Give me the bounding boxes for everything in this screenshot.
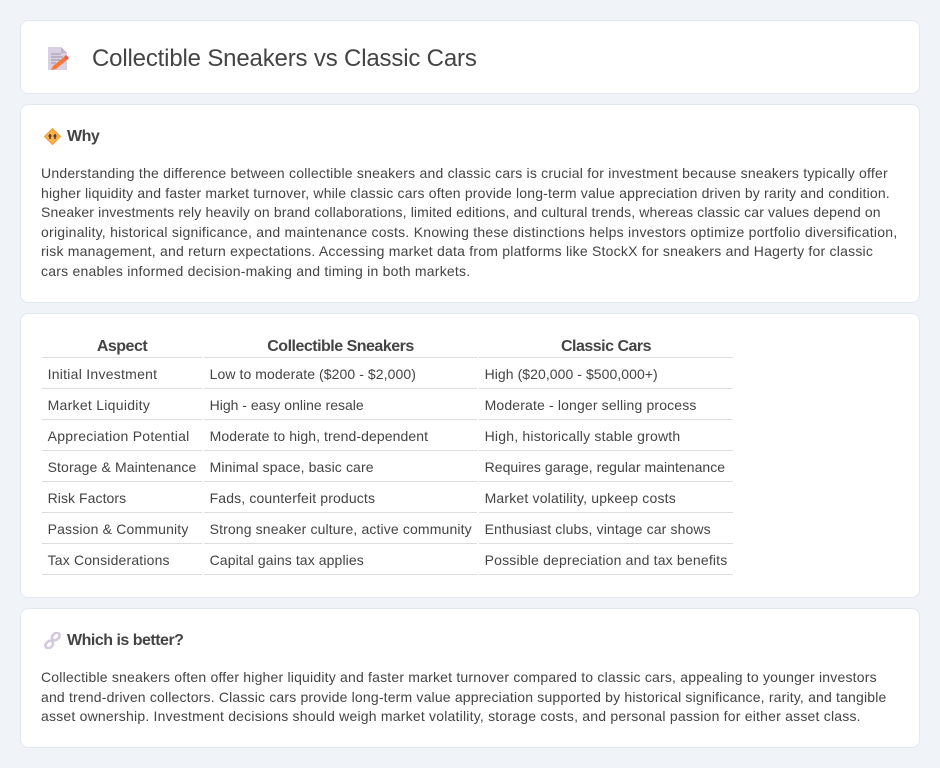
- comparison table: Moderate - longer selling process: [485, 397, 697, 413]
- comparison table: High - easy online resale: [210, 397, 364, 413]
- text block: why explanation: risk management, and return expectations. Accessing market data from platforms like StockX for sneakers and Hagerty for classic: [41, 243, 873, 259]
- comparison table: Requires garage, regular maintenance: [485, 459, 725, 475]
- title: Collectible Sneakers vs Classic Cars: [92, 45, 477, 72]
- icon: document with pencil: [48, 47, 69, 70]
- comparison table: Tax Considerations: [48, 552, 170, 568]
- comparison table: Strong sneaker culture, active community: [210, 521, 472, 537]
- comparison table: Minimal space, basic care: [210, 459, 374, 475]
- comparison table: Storage & Maintenance: [48, 459, 196, 475]
- comparison table: High ($20,000 - $500,000+): [485, 366, 658, 382]
- comparison table: Market Liquidity: [48, 397, 150, 413]
- comparison table: Appreciation Potential: [48, 428, 190, 444]
- comparison table: Capital gains tax applies: [210, 552, 364, 568]
- comparison table: Moderate to high, trend-dependent: [210, 428, 428, 444]
- text block: verdict: [41, 669, 886, 724]
- text block: verdict: asset ownership. Investment decisions should weigh market volatility, storage costs, and personal passion for either asset class.: [41, 708, 861, 724]
- comparison table: Passion & Community: [48, 521, 189, 537]
- comparison table: Collectible Sneakers: [267, 338, 414, 355]
- text block: why explanation: higher liquidity and faster market turnover, while classic cars often provide long-term value appreciation driven by rarity and condition.: [41, 185, 890, 201]
- comparison table: [42, 338, 733, 575]
- icon: chain link: [44, 632, 61, 649]
- comparison table: Fads, counterfeit products: [210, 490, 375, 506]
- comparison table: Risk Factors: [48, 490, 126, 506]
- comparison table: Low to moderate ($200 - $2,000): [210, 366, 416, 382]
- icon: diamond caution sign: [44, 128, 61, 145]
- panel: title card: [20, 20, 920, 94]
- text block: verdict: Collectible sneakers often offer higher liquidity and faster market turnover compared to classic cars, appealing to younger investors: [41, 669, 877, 685]
- comparison table: Classic Cars: [561, 338, 651, 355]
- text block: why explanation: Understanding the difference between collectible sneakers and classic cars is crucial for investment because sneakers typically offer: [41, 165, 888, 181]
- comparison table: High, historically stable growth: [485, 428, 680, 444]
- comparison table: Possible depreciation and tax benefits: [485, 552, 727, 568]
- text block: why explanation: originality, historical significance, and maintenance costs. Knowing these distinctions helps investors optimize portfolio diversification,: [41, 224, 897, 240]
- comparison table: Initial Investment: [48, 366, 157, 382]
- text block: why explanation: [41, 165, 897, 279]
- panel: comparison table card: [20, 313, 920, 598]
- heading: why: Why: [67, 128, 99, 145]
- panel: which is better: [20, 608, 920, 748]
- text block: verdict: and trend-driven collectors. Classic cars provide long-term value appreciation supported by historical significance, rarity, and tangible: [41, 689, 886, 705]
- comparison table: Market volatility, upkeep costs: [485, 490, 676, 506]
- heading: which is better: Which is better?: [67, 632, 183, 649]
- comparison table: Enthusiast clubs, vintage car shows: [485, 521, 711, 537]
- text block: why explanation: Sneaker investments rely heavily on brand collaborations, limited editions, and cultural trends, whereas classic car values depend on: [41, 204, 881, 220]
- comparison table: Aspect: [97, 338, 147, 355]
- panel: why: [20, 104, 920, 303]
- text block: why explanation: cars enables informed decision-making and timing in both markets.: [41, 263, 470, 279]
